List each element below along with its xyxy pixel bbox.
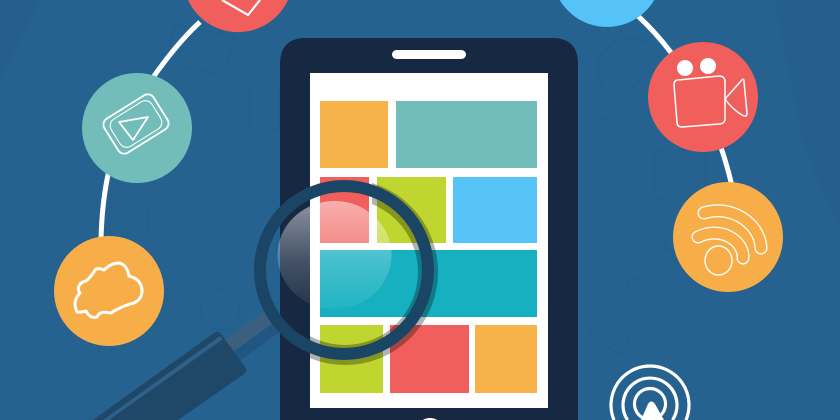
magnifier handle — [93, 304, 289, 420]
icon: blue badge top right — [560, 0, 654, 27]
tile: orange bottom — [475, 325, 537, 393]
icon: video camera badge — [648, 42, 758, 152]
tile: red bottom — [390, 325, 469, 393]
home button — [423, 418, 437, 420]
tile: blue middle — [453, 177, 537, 243]
icon: video play badge — [82, 73, 192, 183]
phone — [280, 38, 578, 420]
lens glass highlight — [278, 201, 392, 309]
connector arc: right — [638, 16, 732, 186]
lens shadow — [310, 183, 438, 365]
tile: green middle — [377, 177, 446, 243]
tile: teal top — [396, 101, 537, 168]
icon: wifi badge — [673, 182, 783, 292]
icon: red badge top left — [188, 0, 288, 32]
phone speaker — [392, 50, 466, 59]
magnifier lens — [260, 186, 428, 355]
icon: cloud badge — [54, 236, 164, 346]
phone body — [280, 38, 578, 420]
handle highlight — [103, 336, 222, 420]
handle grip — [93, 332, 246, 420]
icon: touch target rings — [611, 366, 689, 420]
tile: orange top — [320, 101, 388, 168]
handle neck — [225, 304, 289, 361]
connector arc: left — [101, 22, 200, 240]
phone screen — [310, 73, 548, 408]
tile: red middle — [320, 177, 369, 243]
lens ring — [260, 186, 428, 354]
tile: green bottom — [320, 325, 383, 393]
tile: cyan wide — [320, 250, 537, 317]
